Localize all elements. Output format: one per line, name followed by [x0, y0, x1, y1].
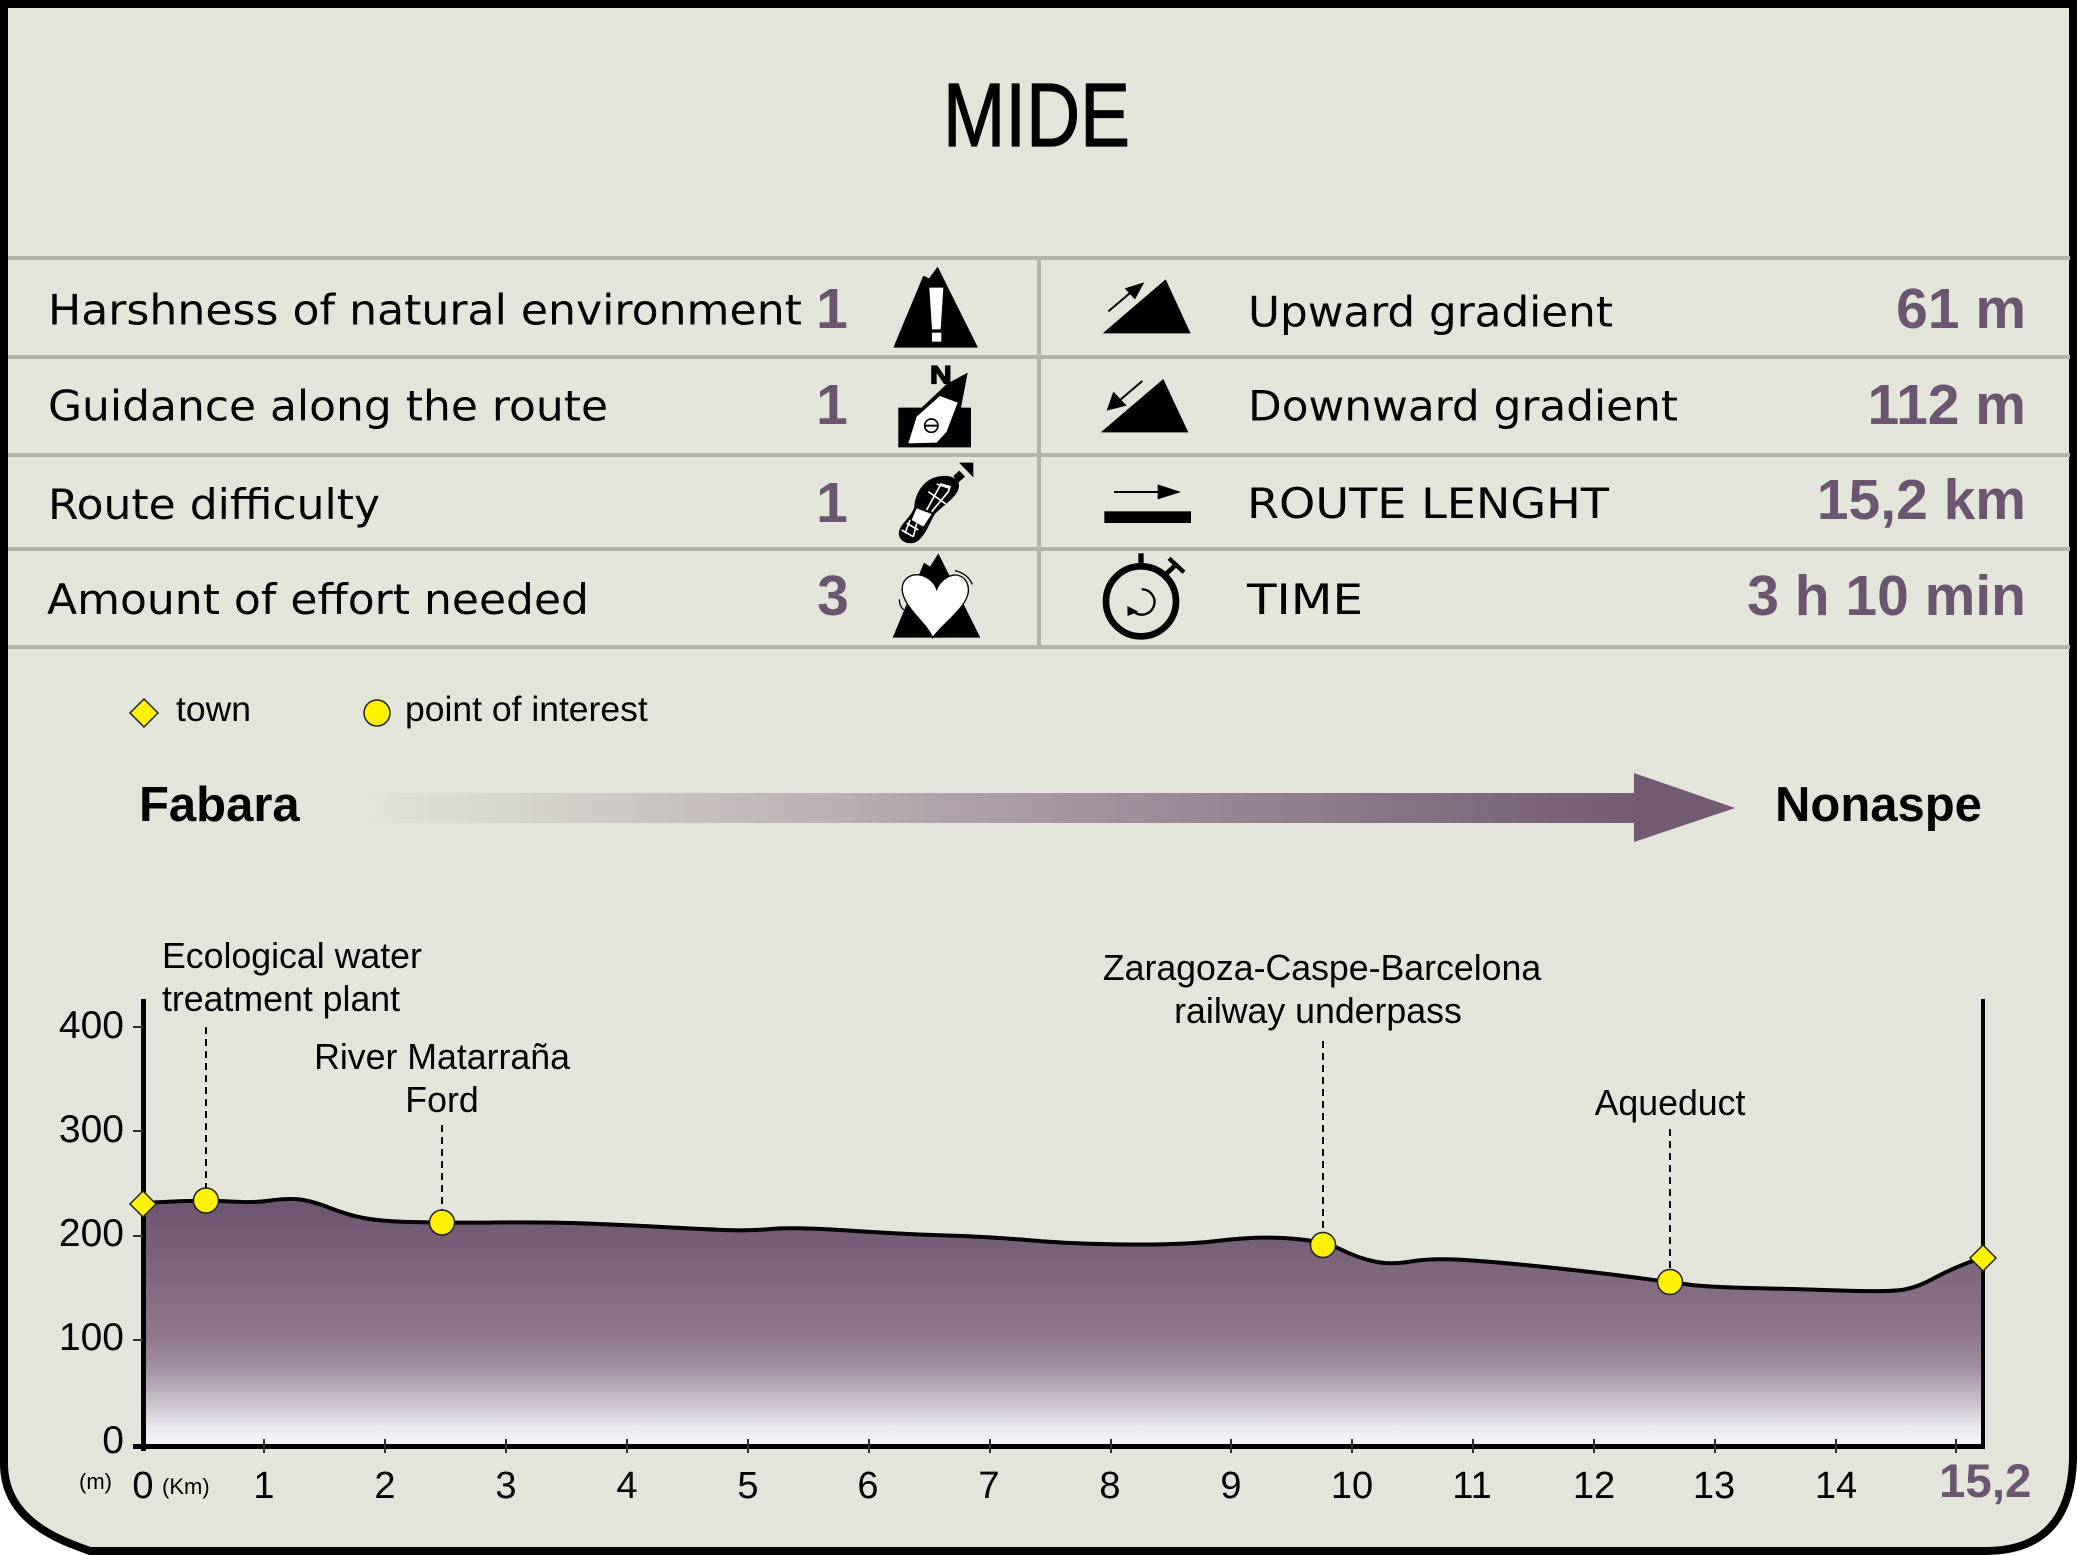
- row label: harshness: Harshness of natural environment: [48, 286, 802, 334]
- total distance label: 15,2: [1939, 1455, 2031, 1508]
- icon: compass guidance: [898, 362, 971, 447]
- x axis labels: 8: [1099, 1465, 1121, 1507]
- title: MIDE: [943, 66, 1130, 166]
- x axis labels: 0: [132, 1465, 154, 1507]
- x axis labels: 6: [857, 1465, 879, 1507]
- y axis labels: 0: [102, 1419, 124, 1462]
- x axis labels: 10: [1331, 1465, 1373, 1507]
- markers: points of interest: [194, 1188, 1682, 1294]
- x axis labels: 7: [978, 1465, 1000, 1507]
- y axis labels: [59, 1004, 124, 1462]
- label: ecological water treatment plant: treatment plant: [162, 979, 400, 1019]
- label: aqueduct: Aqueduct: [1595, 1083, 1745, 1123]
- row label: guidance: Guidance along the route: [48, 382, 608, 430]
- x axis labels: 3: [495, 1465, 517, 1507]
- row label: upward gradient: Upward gradient: [1248, 288, 1613, 336]
- leader lines: [206, 1027, 1670, 1272]
- y axis labels: 400: [59, 1004, 124, 1047]
- legend: town: [130, 689, 251, 729]
- label: river Matarraña ford: Ford: [405, 1080, 479, 1120]
- x axis labels: 14: [1815, 1465, 1857, 1507]
- x axis labels: 4: [616, 1465, 638, 1507]
- icon: stopwatch: [1106, 553, 1184, 636]
- value: guidance: 1: [816, 373, 848, 437]
- panel: MIDE table: [8, 256, 2070, 649]
- y axis labels: 300: [59, 1108, 124, 1151]
- row label: route difficulty: Route difficulty: [48, 480, 380, 529]
- icon: route length: [1104, 484, 1191, 523]
- value: upward gradient: 61 m: [1896, 277, 2026, 341]
- label: railway underpass: Zaragoza-Caspe-Barcelona: [1103, 948, 1541, 988]
- icon: boot sole: [899, 463, 973, 543]
- x axis labels: 5: [737, 1465, 759, 1507]
- value: time: 3 h 10 min: [1747, 564, 2026, 628]
- label: river Matarraña ford: [314, 1037, 570, 1120]
- row label: downward gradient: Downward gradient: [1248, 382, 1678, 430]
- axes and ticks: [133, 999, 1985, 1453]
- legend: town: town: [176, 689, 251, 729]
- value: route length: 15,2 km: [1817, 468, 2026, 532]
- x axis labels: 11: [1452, 1465, 1492, 1507]
- legend: point of interest: point of interest: [405, 689, 648, 729]
- legend: [130, 689, 648, 729]
- x axis labels: 2: [374, 1465, 396, 1507]
- icon: heart mountain: [893, 553, 980, 638]
- icon: warning mountain: [893, 267, 978, 348]
- y axis labels: 200: [59, 1212, 124, 1255]
- x axis labels: 13: [1693, 1465, 1735, 1507]
- elevation profile area: [143, 1199, 1983, 1445]
- value: effort: 3: [817, 564, 849, 628]
- start town: Fabara: Fabara: [139, 778, 300, 832]
- y axis labels: 100: [59, 1316, 124, 1359]
- elevation profile line: [143, 1199, 1983, 1291]
- row label: time: TIME: [1246, 575, 1363, 624]
- icon: compass guidance: N: [930, 362, 952, 389]
- row label: route length: ROUTE LENGHT: [1247, 479, 1609, 528]
- x axis labels: [132, 1465, 1857, 1507]
- elevation chart: [59, 936, 2031, 1508]
- label: railway underpass: railway underpass: [1174, 991, 1462, 1031]
- label: ecological water treatment plant: [162, 936, 422, 1019]
- unit label: metres: (m): [79, 1469, 112, 1494]
- label: railway underpass: [1103, 948, 1541, 1031]
- value: route difficulty: 1: [816, 471, 848, 535]
- value: downward gradient: 112 m: [1868, 373, 2026, 437]
- x axis labels: 9: [1220, 1465, 1242, 1507]
- arrow: route direction: [360, 773, 1735, 842]
- unit label: kilometres: (Km): [162, 1474, 210, 1499]
- x axis labels: 1: [253, 1465, 275, 1507]
- label: ecological water treatment plant: Ecological water: [162, 936, 422, 976]
- end town: Nonaspe: Nonaspe: [1775, 778, 1982, 832]
- label: river Matarraña ford: River Matarraña: [314, 1037, 570, 1077]
- x axis labels: 12: [1573, 1465, 1615, 1507]
- icon: downward gradient: [1101, 379, 1188, 432]
- markers: towns: [130, 1191, 1996, 1271]
- row label: effort: Amount of effort needed: [47, 575, 589, 624]
- icon: upward gradient: [1103, 279, 1191, 333]
- value: harshness: 1: [816, 277, 848, 341]
